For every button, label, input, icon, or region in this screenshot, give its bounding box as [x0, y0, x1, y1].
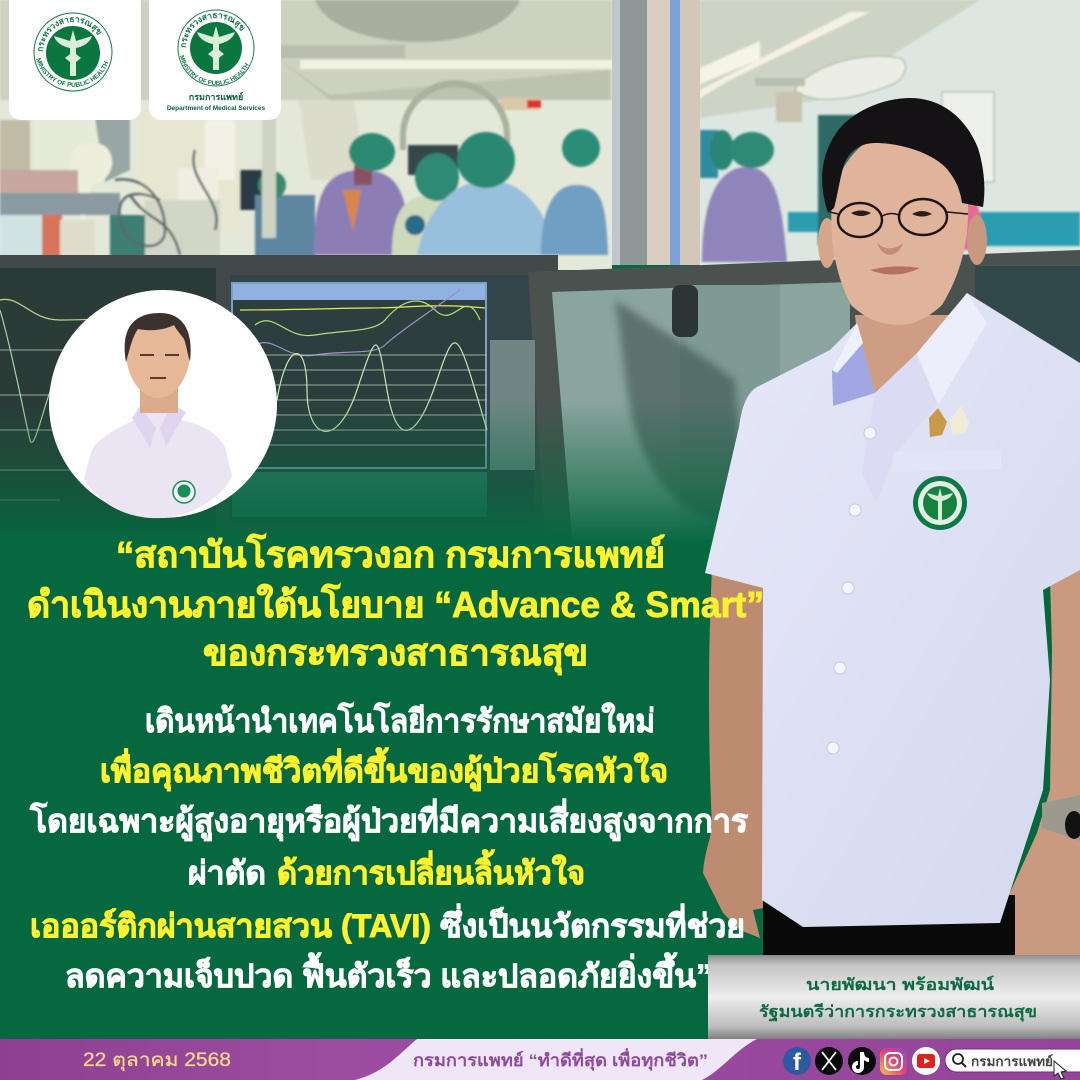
- left arm: [703, 570, 764, 938]
- icon: YouTube: [912, 1047, 940, 1075]
- shirt emblem: [913, 476, 967, 530]
- name plate: [708, 955, 1080, 1039]
- body text: ลดความเจ็บปวด ฟื้นตัวเร็ว และปลอดภัยยิ่งขึ้น”: [65, 952, 712, 994]
- body text: ด้วยการเปลี่ยนลิ้นหัวใจ: [277, 849, 585, 891]
- date: 22 ตุลาคม 2568: [83, 1050, 231, 1072]
- body text: ผ่าตัด: [188, 855, 266, 891]
- collar right: [917, 293, 987, 405]
- staff: [314, 170, 410, 255]
- collar left: [832, 323, 875, 406]
- slogan: กรมการแพทย์ “ทำดีที่สุด เพื่อทุกชีวิต”: [413, 1048, 708, 1071]
- body text: เอออร์ติกผ่านสายสวน (TAVI): [30, 908, 431, 944]
- search pill: กรมการแพทย์: [971, 1054, 1053, 1069]
- icon: X: [815, 1047, 843, 1075]
- logo: Department of Medical Services: MINISTRY OF PUBLIC HEALTH: [180, 55, 249, 86]
- ears and face: [818, 218, 836, 268]
- name plate: นายพัฒนา พร้อมพัฒน์: [806, 975, 994, 994]
- name plate: รัฐมนตรีว่าการกระทรวงสาธารณสุข: [759, 1002, 1037, 1022]
- icon: facebook: f: [793, 1049, 802, 1076]
- body text: [29, 702, 748, 994]
- right ceiling: [700, 0, 980, 118]
- icon: Instagram: [880, 1048, 907, 1075]
- presenter: minister photo: [703, 98, 1080, 955]
- logo: Department of Medical Services: กรมการแพทย์: [189, 91, 243, 102]
- logo: Ministry of Public Health: MINISTRY OF PUBLIC HEALTH: [36, 58, 108, 87]
- window pillar: [612, 0, 647, 265]
- pocket: [893, 450, 1001, 472]
- portrait: circular photo: [49, 290, 277, 518]
- icon: facebook: [783, 1047, 811, 1076]
- glasses: [830, 199, 968, 237]
- body text: เดินหน้านำเทคโนโลยีการรักษาสมัยใหม่: [145, 702, 655, 739]
- ceiling left: [0, 0, 612, 100]
- body text: ซึ่งเป็นนวัตกรรมที่ช่วย: [440, 903, 745, 944]
- body text: โดยเฉพาะผู้สูงอายุหรือผู้ป่วยที่มีความเสี่ยงสูงจากการ: [29, 798, 748, 842]
- right arm and hand: [1002, 565, 1080, 955]
- headline: ดำเนินงานภายใต้นโยบาย “Advance & Smart”: [27, 583, 764, 625]
- body text: เพื่อคุณภาพชีวิตที่ดีขึ้นของผู้ป่วยโรคหัวใจ: [100, 747, 668, 792]
- hair: [822, 98, 984, 213]
- icon: TikTok: [848, 1047, 876, 1075]
- pins: [929, 408, 947, 437]
- logo: Ministry of Public Health: [9, 0, 141, 120]
- buttons: [864, 427, 876, 439]
- trousers: [763, 895, 1015, 955]
- headline: [27, 533, 764, 676]
- eyes and mouth: [851, 210, 932, 216]
- logo: Department of Medical Services: Department of Medical Services: [167, 105, 266, 112]
- left room equipment: [0, 120, 30, 180]
- logo: Department of Medical Services: กระทรวงสาธารณสุข: [181, 13, 245, 48]
- watch: [1042, 795, 1080, 841]
- shirt: [705, 293, 1080, 927]
- footer bar: [0, 1039, 1080, 1080]
- top monitor: [408, 145, 458, 175]
- logo: Department of Medical Services: [149, 0, 281, 120]
- search pill: [945, 1049, 1080, 1079]
- monitors: [0, 255, 558, 540]
- headline: ของกระทรวงสาธารณสุข: [203, 632, 588, 676]
- logo: Ministry of Public Health: กระทรวงสาธารณสุข: [38, 17, 102, 52]
- headline: “สถาบันโรคทรวงอก กรมการแพทย์: [116, 533, 665, 575]
- neck: [855, 315, 950, 393]
